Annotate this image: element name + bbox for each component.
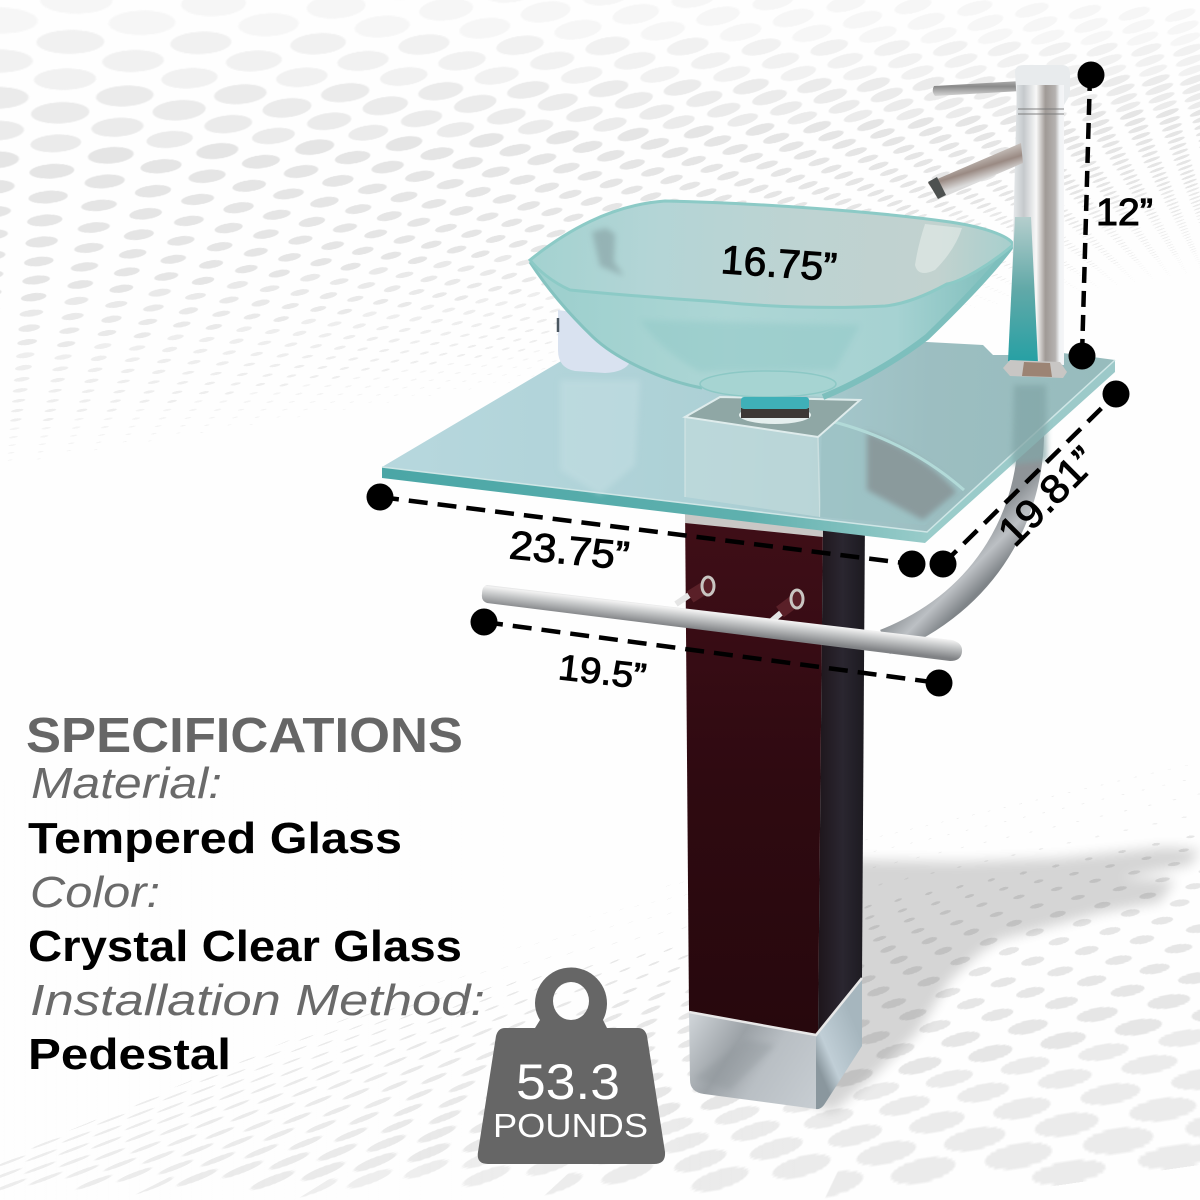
bowl interior highlight — [915, 224, 962, 273]
square base block under bowl — [685, 397, 860, 437]
bowl foot — [700, 371, 836, 397]
weight icon with 53.3 pounds — [478, 968, 665, 1164]
color label: Color: — [30, 868, 160, 917]
drain — [739, 397, 811, 424]
weight shape — [478, 968, 665, 1164]
dimension: towel bar 19.5 inches: 19.5” — [556, 646, 648, 697]
material label: Material: — [31, 759, 222, 808]
dimension: faucet height 12 inches — [1068, 62, 1153, 370]
dimension: counter depth 19.81 inches: 19.81” — [990, 439, 1106, 555]
floor shadow — [800, 847, 1200, 1112]
dimension: counter depth 19.81 inches — [930, 380, 1130, 578]
reflection of column through glass — [685, 417, 820, 517]
reflection of soap dispenser — [560, 380, 640, 495]
faucet base — [1003, 360, 1067, 378]
thick glass at lower right — [823, 245, 1012, 397]
soap pump seen through glass — [592, 228, 624, 276]
glass vessel bowl — [530, 201, 1013, 424]
material value: Tempered Glass — [28, 814, 402, 863]
heading: SPECIFICATIONS — [26, 709, 463, 763]
pedestal front face — [685, 505, 823, 1035]
dimension: towel bar 19.5 inches — [470, 608, 952, 697]
dimension: bowl 16.75 inches: 16.75” — [720, 238, 838, 290]
chrome foot — [689, 978, 862, 1109]
countertop edge — [382, 360, 1115, 543]
color value: Crystal Clear Glass — [28, 922, 462, 971]
specifications text block — [26, 709, 485, 1079]
bowl body shading — [640, 320, 860, 372]
installation label: Installation Method: — [30, 976, 485, 1025]
weight unit: POUNDS — [493, 1107, 648, 1144]
dimension: counter width 23.75 inches — [366, 484, 926, 579]
towel bar mounting posts — [676, 577, 803, 624]
faucet body — [1010, 85, 1064, 365]
soap dispenser — [558, 310, 630, 373]
curved towel bar support rod — [885, 430, 1031, 642]
curved teal reflection — [820, 420, 962, 525]
wooden pedestal column with chrome foot — [685, 505, 865, 1109]
dimension: counter width 23.75 inches: 23.75” — [507, 523, 631, 579]
pedestal side face — [818, 515, 865, 1035]
installation value: Pedestal — [28, 1030, 231, 1079]
dimension: faucet height 12 inches: 12” — [1096, 192, 1153, 234]
faucet spout — [928, 143, 1023, 199]
rod reflection through glass — [1012, 385, 1047, 465]
bowl rim and interior — [530, 201, 1013, 307]
faucet collar rings — [1018, 109, 1064, 114]
weight number: 53.3 — [516, 1054, 620, 1110]
countertop top surface — [382, 338, 1115, 532]
faucet — [928, 65, 1070, 378]
faucet handle — [933, 81, 1022, 96]
metal strip under glass — [685, 505, 823, 537]
faucet cap — [1015, 65, 1070, 105]
teal glass reflection on faucet — [1008, 217, 1038, 363]
bowl outer body — [530, 245, 1012, 397]
dark wedge reflection through glass — [867, 432, 957, 520]
glass countertop — [382, 338, 1115, 543]
towel bar — [482, 585, 962, 661]
